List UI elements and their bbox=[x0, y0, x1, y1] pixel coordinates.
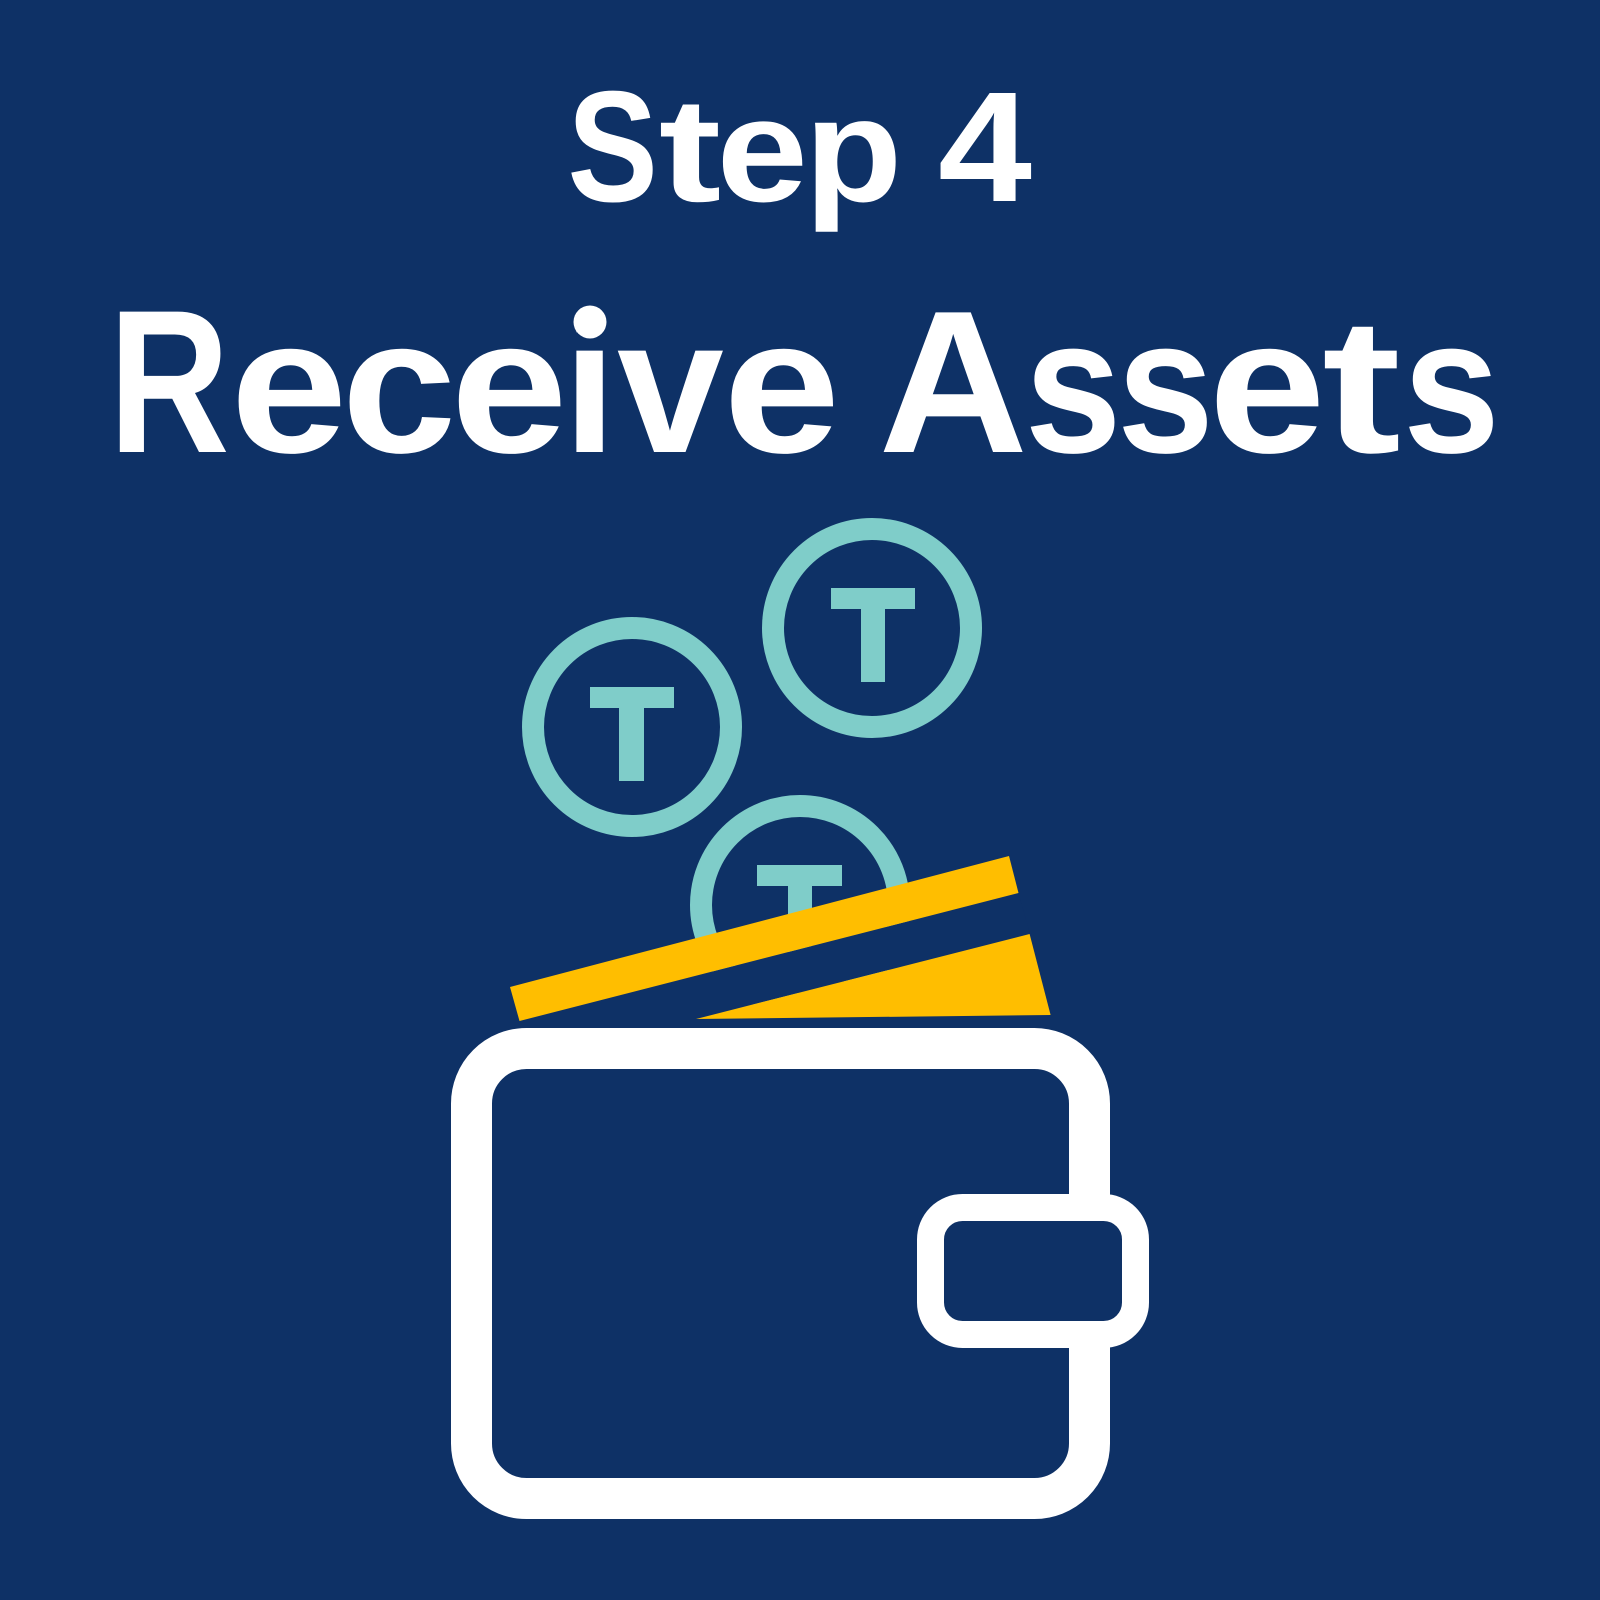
title: receive assets: v bbox=[617, 278, 724, 493]
icon: top coin bbox=[773, 529, 971, 727]
title: receive assets: e bbox=[723, 278, 840, 493]
title: receive assets: A bbox=[878, 269, 1028, 496]
title: receive assets: e bbox=[1209, 278, 1326, 493]
icon: card in wallet bbox=[510, 856, 1051, 1040]
heading: step number: t bbox=[659, 68, 721, 233]
icon: round dot of the letter i bbox=[574, 306, 606, 338]
title: receive assets: s bbox=[1025, 278, 1122, 493]
title: receive assets: s bbox=[1117, 278, 1214, 493]
icon: wallet bbox=[472, 1048, 1136, 1498]
wallet body bbox=[472, 1048, 1090, 1498]
icon: coin entering wallet bbox=[701, 806, 899, 1004]
title: receive assets: R bbox=[109, 268, 230, 496]
title: receive assets: t bbox=[1322, 278, 1401, 493]
heading: step number: 4 bbox=[938, 60, 1032, 235]
heading: step number: e bbox=[716, 68, 808, 233]
title: receive assets: s bbox=[1403, 278, 1500, 493]
heading: step number: p bbox=[804, 68, 902, 233]
title: receive assets: c bbox=[342, 278, 456, 493]
title: receive assets: i bbox=[563, 278, 616, 493]
title: receive assets: e bbox=[230, 278, 347, 493]
title: receive assets: e bbox=[451, 278, 568, 493]
heading: step number: S bbox=[567, 59, 658, 235]
wallet clasp bbox=[930, 1208, 1136, 1334]
icon: left coin bbox=[533, 628, 731, 826]
